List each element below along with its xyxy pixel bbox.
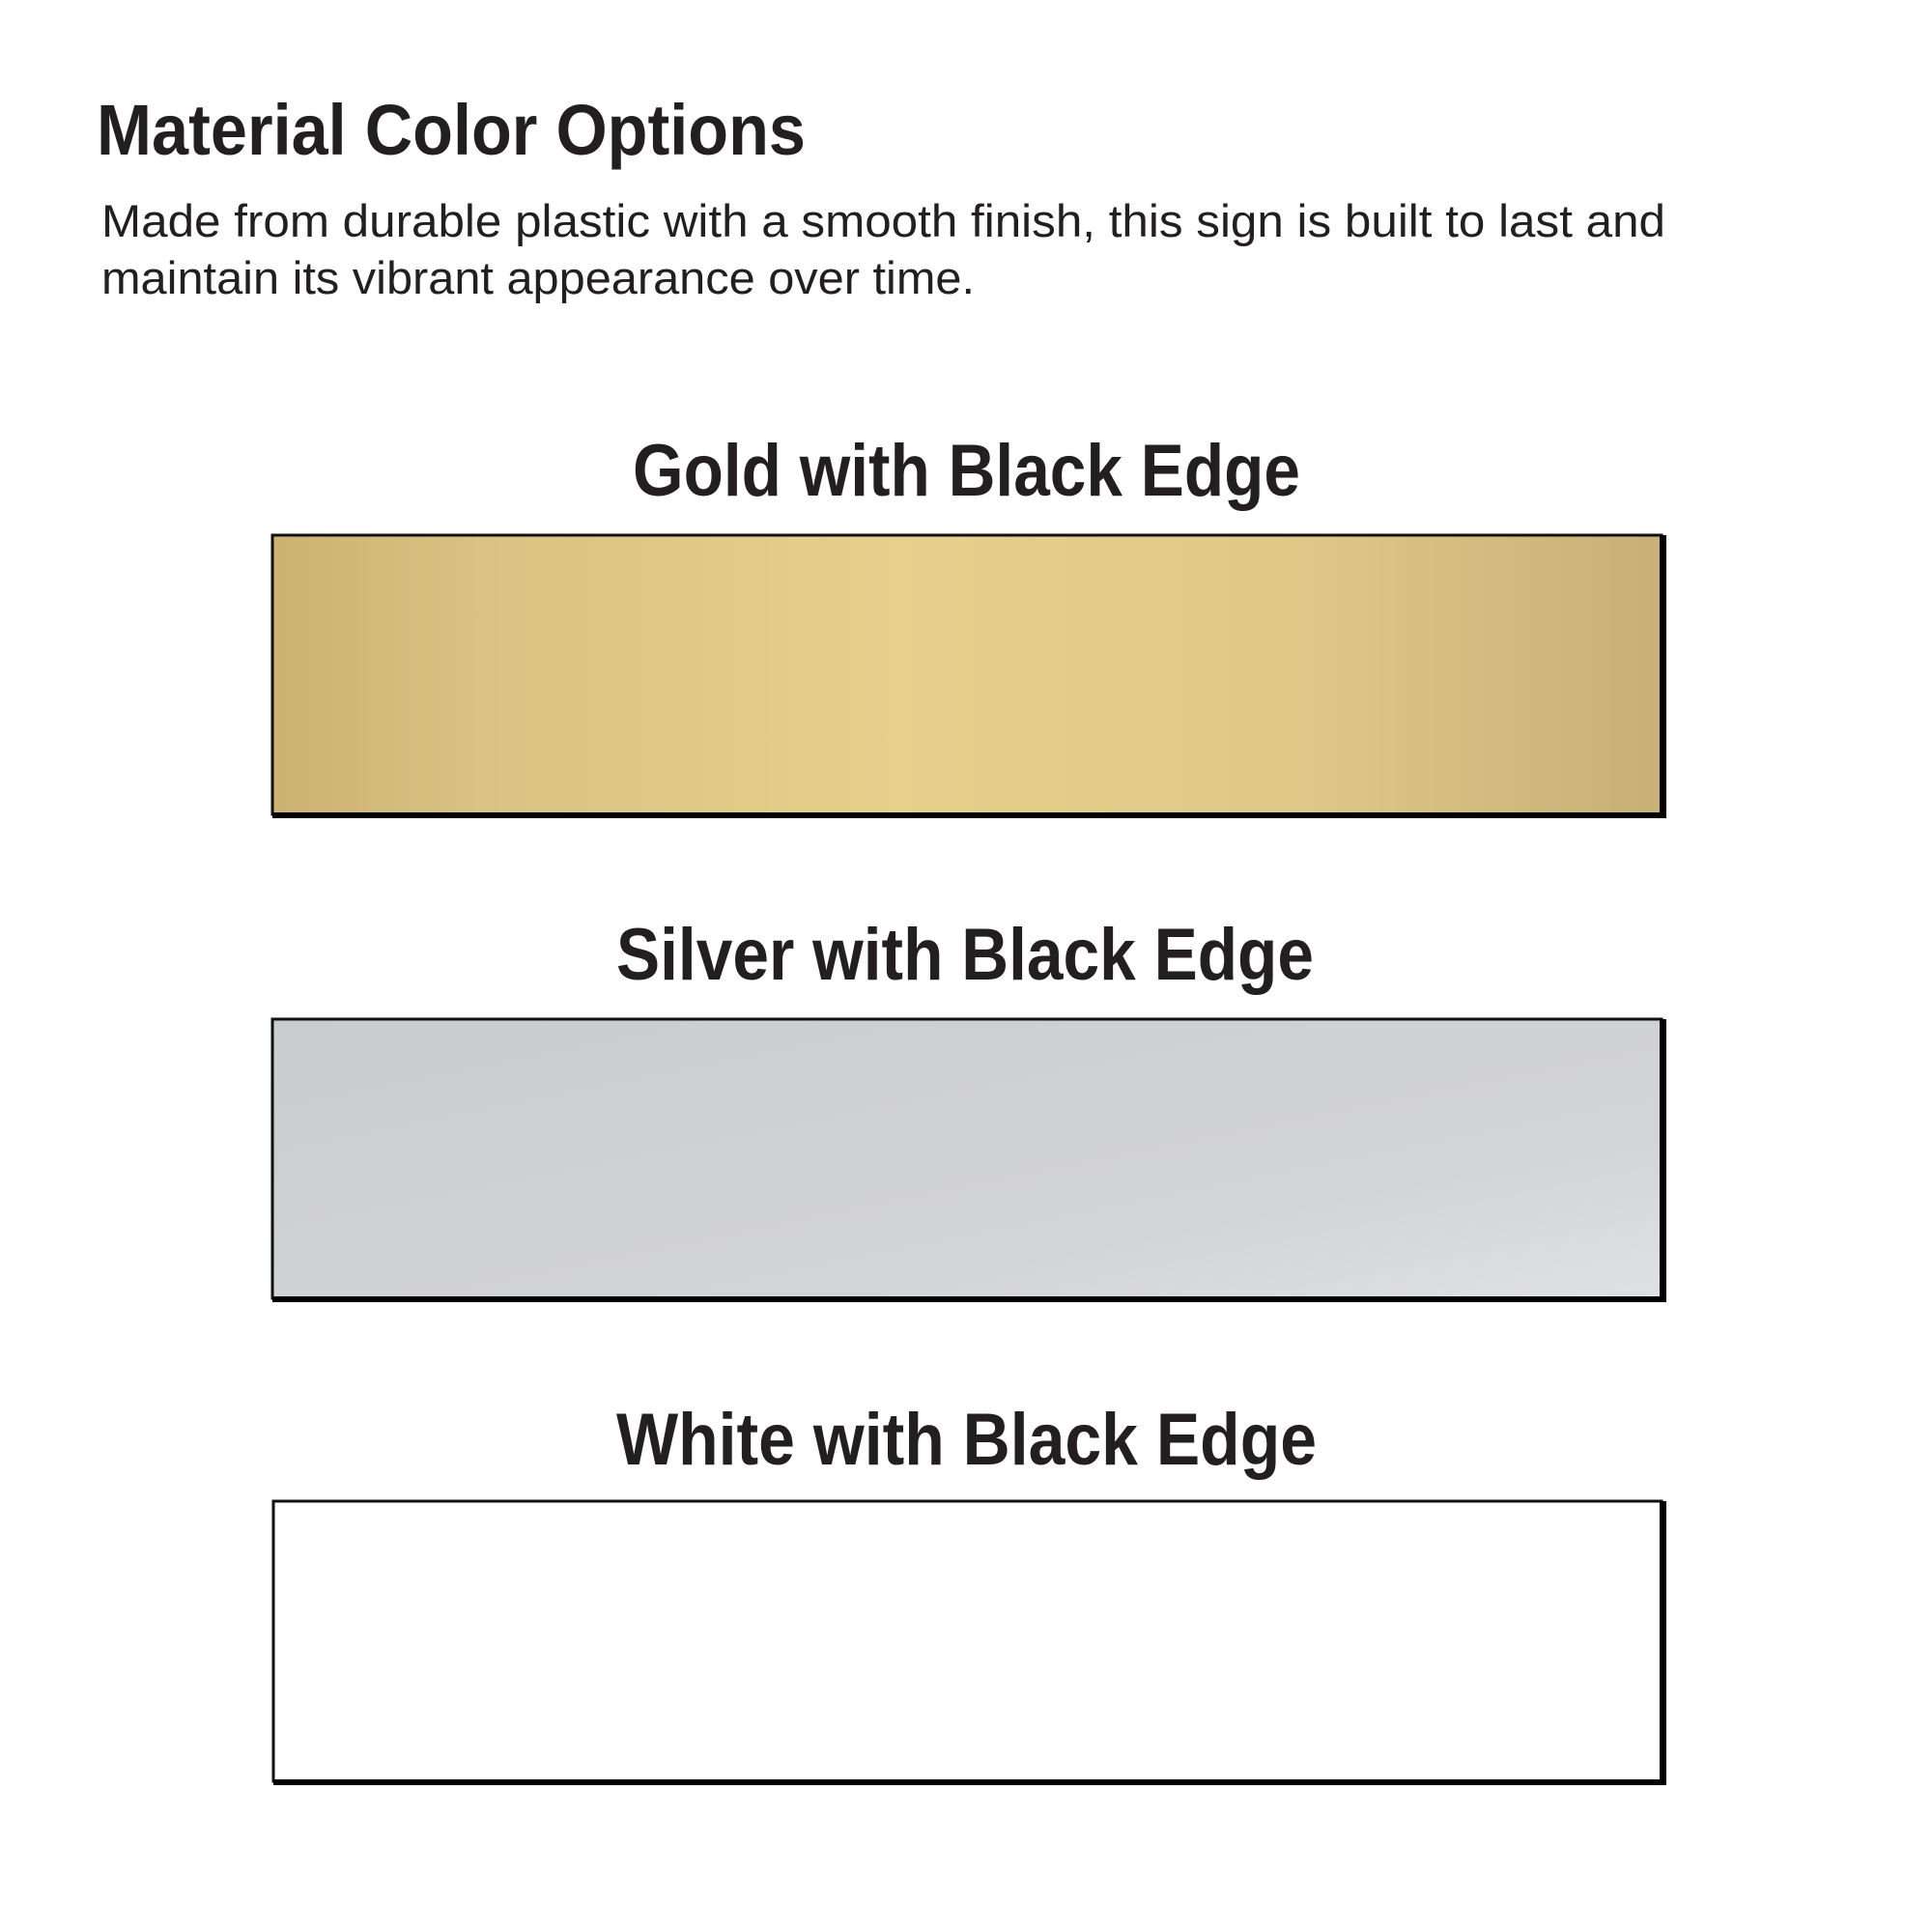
swatch: white: [273, 1501, 1666, 1785]
description text: maintain its vibrant appearance over time.: [101, 252, 975, 303]
heading: white: White with Black Edge: [616, 1399, 1317, 1481]
heading: gold: Gold with Black Edge: [633, 430, 1300, 512]
description text: [101, 195, 1665, 303]
swatch: silver: [272, 1019, 1666, 1302]
heading: silver: Silver with Black Edge: [616, 914, 1314, 996]
title: Material Color Options: [97, 90, 806, 170]
description text: Made from durable plastic with a smooth finish, this sign is built to last and: [101, 195, 1665, 246]
swatch: gold: [272, 535, 1666, 818]
